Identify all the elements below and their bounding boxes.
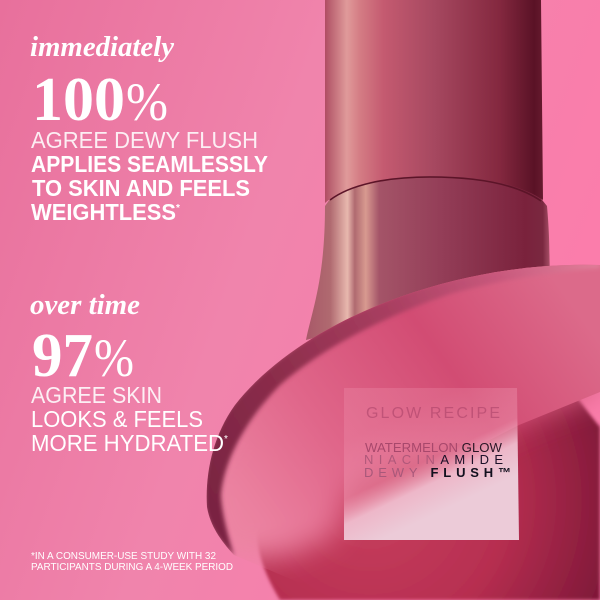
stat description bold: WEIGHTLESS <box>31 199 176 225</box>
label panel <box>344 388 519 540</box>
stat 100% <box>32 66 168 134</box>
swatch rim <box>205 263 600 556</box>
stat 97%: % <box>94 328 134 388</box>
bottle cap <box>325 0 543 203</box>
stat block: over time <box>30 290 228 456</box>
product label <box>344 388 519 540</box>
stat description regular: * <box>224 434 228 445</box>
label product name <box>364 440 511 480</box>
swatch ribbon <box>190 240 600 560</box>
label brand name: GLOW RECIPE <box>366 405 500 422</box>
stat description regular <box>31 406 228 456</box>
stat 97%: 97 <box>32 322 93 390</box>
stat description light: AGREE SKIN <box>31 382 162 408</box>
stat 100%: 100 <box>32 66 125 134</box>
stat description bold <box>31 151 268 225</box>
swatch blurred lower fade <box>222 266 600 572</box>
stat description bold: APPLIES SEAMLESSLY <box>31 151 268 177</box>
stat description bold: TO SKIN AND FEELS <box>32 175 250 201</box>
footnote: PARTICIPANTS DURING A 4-WEEK PERIOD <box>31 561 233 573</box>
label product name: WATERMELON GLOW <box>365 440 503 455</box>
swatch solid upper part <box>313 265 600 429</box>
stat 97% <box>32 322 134 390</box>
footnote <box>31 550 233 573</box>
heading: over time <box>30 290 140 321</box>
bottle collar <box>306 170 550 340</box>
stat description light: AGREE DEWY FLUSH <box>31 127 258 153</box>
stat block: immediately <box>30 32 268 225</box>
stat description bold: * <box>176 203 180 214</box>
stat description regular: MORE HYDRATED <box>31 430 224 456</box>
label product name: DEWY FLUSH™ <box>364 465 511 480</box>
product: bottle <box>257 0 600 600</box>
stat description regular: LOOKS & FEELS <box>31 406 203 432</box>
bottle body <box>257 370 600 600</box>
heading: immediately <box>30 32 175 63</box>
footnote: *IN A CONSUMER-USE STUDY WITH 32 <box>31 550 216 562</box>
stat 100%: % <box>126 72 168 132</box>
cap lower shadow line <box>330 177 541 201</box>
label product name: NIACIN AMIDE <box>364 452 503 467</box>
